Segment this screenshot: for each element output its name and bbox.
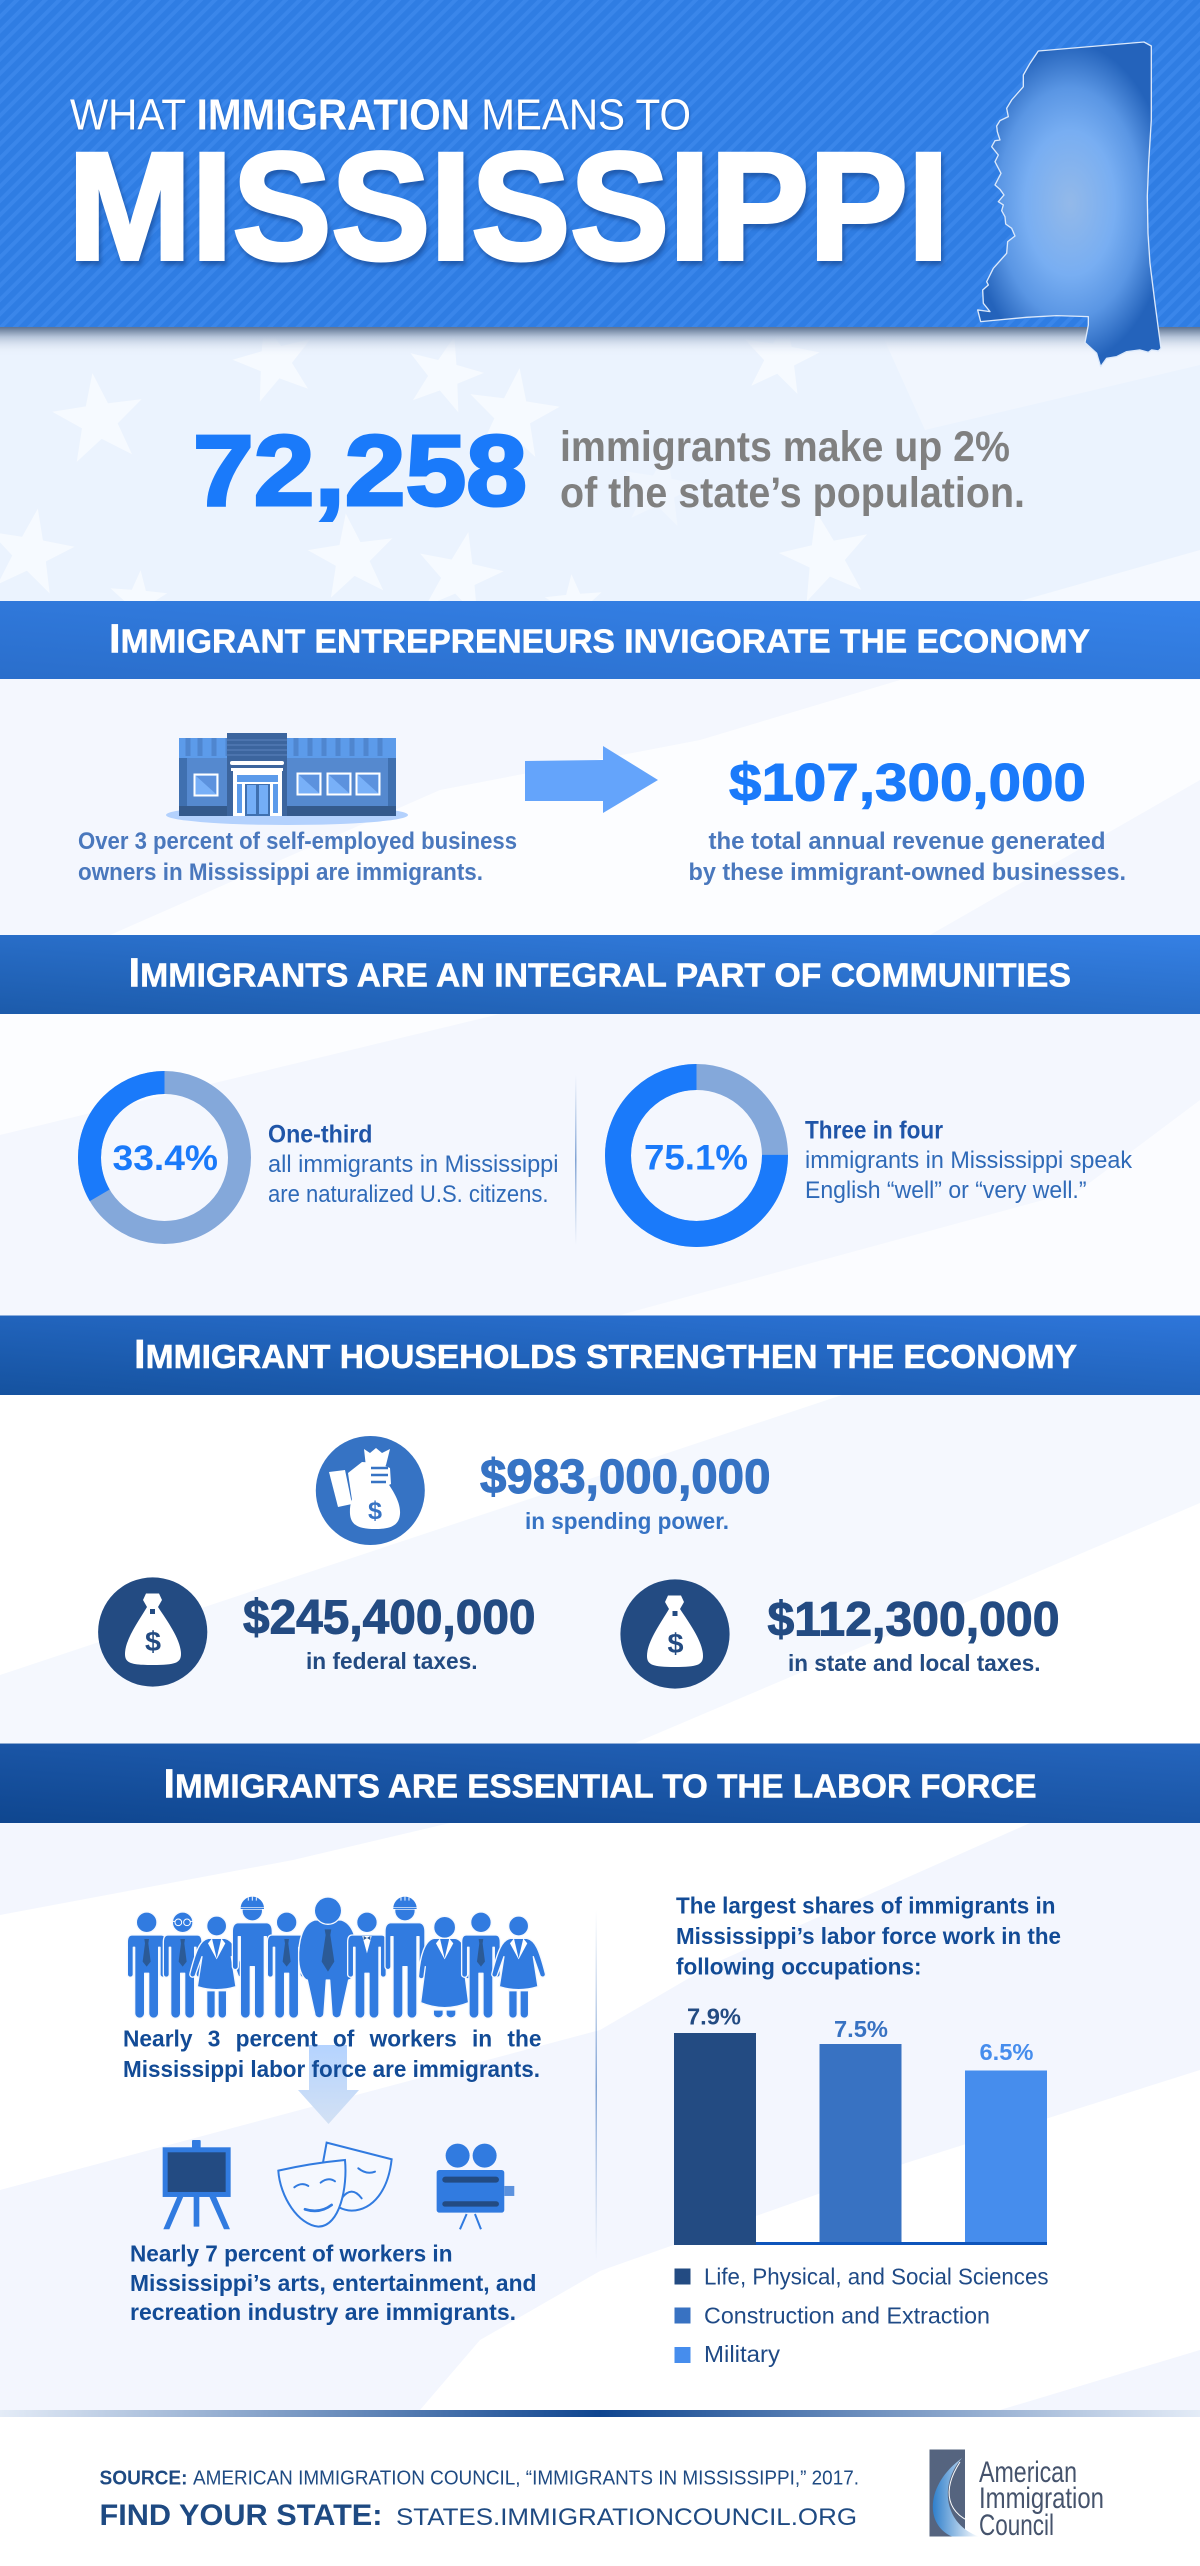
legend: Construction and Extraction bbox=[704, 2302, 990, 2328]
person bbox=[462, 1912, 500, 2018]
statistic caption bbox=[560, 423, 1025, 517]
logo: American Immigration Council: American bbox=[979, 2456, 1077, 2489]
statistic: state and local taxes: $112,300,000 bbox=[768, 1594, 1060, 1646]
text: arts and entertainment workers bbox=[130, 2240, 536, 2325]
text: three in four speak English bbox=[805, 1116, 1133, 1204]
section band: entrepreneurs bbox=[0, 601, 1200, 679]
text: chart heading bbox=[676, 1892, 1061, 1980]
text: workers in labor force: Nearly 3 percent of workers in the bbox=[123, 2026, 542, 2052]
person with glasses bbox=[163, 1912, 202, 2018]
title: Mississippi: MISSISSIPPI bbox=[68, 121, 949, 292]
person: woman bbox=[190, 1916, 243, 2018]
footer: source: AMERICAN IMMIGRATION COUNCIL, “IMMIGRANTS IN MISSISSIPPI,” 2017. bbox=[193, 2466, 859, 2490]
footer: source: SOURCE: bbox=[100, 2466, 188, 2490]
logo: American Immigration Council: Council bbox=[979, 2509, 1054, 2542]
statistic: business revenue bbox=[688, 754, 1126, 886]
statistic caption: of the state’s population. bbox=[560, 469, 1025, 517]
statistic: federal taxes: in federal taxes. bbox=[306, 1648, 478, 1674]
statistic: business revenue: by these immigrant-owned businesses. bbox=[688, 859, 1126, 886]
text: self-employed owners bbox=[78, 828, 517, 886]
footer: source bbox=[100, 2466, 859, 2532]
icon: money bag state and local bbox=[620, 1579, 730, 1689]
donut chart: 75.1%: 75.1% bbox=[644, 1138, 748, 1178]
person: hard hat bbox=[232, 1896, 272, 2018]
icon: hand holding money bag: $ bbox=[368, 1497, 382, 1525]
icon: hand holding money bag bbox=[316, 1436, 425, 1545]
icon: money bag federal bbox=[98, 1577, 207, 1687]
text: three in four speak English: Three in four bbox=[805, 1116, 943, 1144]
bar chart: occupations bbox=[674, 2004, 1047, 2245]
section band: labor force bbox=[0, 1744, 1200, 1823]
logo: American Immigration Council: Immigration bbox=[979, 2482, 1104, 2515]
big number: 72,258 bbox=[193, 415, 527, 527]
text: one-third naturalized: are naturalized U.S. citizens. bbox=[268, 1181, 548, 1208]
text: self-employed owners: Over 3 percent of self-employed business bbox=[78, 828, 517, 855]
bar: military bbox=[965, 2070, 1047, 2242]
statistic caption: immigrants make up 2% bbox=[560, 423, 1010, 471]
icon: film camera bbox=[437, 2144, 514, 2229]
text: three in four speak English: immigrants in Mississippi speak bbox=[805, 1147, 1133, 1174]
icon: easel bbox=[163, 2140, 231, 2229]
title: what immigration means to: WHAT IMMIGRATION MEANS TO bbox=[70, 90, 691, 140]
value label 7.9%: 7.9% bbox=[687, 2004, 741, 2030]
section band: households bbox=[0, 1316, 1200, 1395]
icon: money bag federal: $ bbox=[145, 1626, 161, 1657]
arrow: down bbox=[298, 2045, 359, 2124]
header panel bbox=[0, 0, 1200, 367]
statistic: state and local taxes: in state and local taxes. bbox=[788, 1650, 1040, 1676]
text: one-third naturalized bbox=[268, 1120, 558, 1208]
text: arts and entertainment workers: Nearly 7 percent of workers in bbox=[130, 2240, 452, 2266]
person: woman bbox=[492, 1916, 545, 2018]
donut chart: 75.1% bbox=[618, 1077, 775, 1234]
statistic: spending power bbox=[480, 1451, 770, 1534]
text: chart heading: following occupations: bbox=[676, 1954, 922, 1980]
person: large man bbox=[299, 1897, 357, 2018]
text: chart heading: Mississippi’s labor force work in the bbox=[676, 1923, 1061, 1949]
bar: life, physical, and social sciences bbox=[674, 2033, 756, 2245]
value label 7.5%: 7.5% bbox=[834, 2016, 888, 2042]
person bbox=[267, 1912, 306, 2018]
arrow: right bbox=[525, 746, 658, 813]
person bbox=[127, 1912, 166, 2018]
icon: money bag state and local: $ bbox=[668, 1628, 684, 1659]
text: arts and entertainment workers: Mississippi’s arts, entertainment, and bbox=[130, 2270, 536, 2296]
legend bbox=[674, 2264, 1048, 2367]
text: workers in labor force: Mississippi labor force are immigrants. bbox=[123, 2056, 540, 2082]
footer: source: FIND YOUR STATE: bbox=[100, 2499, 382, 2532]
statistic: federal taxes: $245,400,000 bbox=[243, 1592, 536, 1644]
bar: construction and extraction bbox=[820, 2044, 902, 2242]
statistic: spending power: $983,000,000 bbox=[480, 1451, 770, 1504]
statistic: 72,258 immigrants bbox=[193, 415, 1025, 527]
donut chart: 33.4% bbox=[90, 1082, 240, 1232]
icon: group of workers bbox=[127, 1896, 545, 2018]
text: self-employed owners: owners in Mississippi are immigrants. bbox=[78, 859, 483, 886]
footer: source: STATES.IMMIGRATIONCOUNCIL.ORG bbox=[396, 2504, 857, 2531]
value label 6.5%: 6.5% bbox=[980, 2039, 1034, 2065]
statistic: spending power: in spending power. bbox=[525, 1508, 729, 1534]
statistic: business revenue: $107,300,000 bbox=[729, 754, 1086, 812]
icon: theater masks bbox=[278, 2143, 392, 2227]
section band: entrepreneurs: IMMIGRANT ENTREPRENEURS INVIGORATE THE ECONOMY bbox=[109, 616, 1090, 662]
section band: communities: IMMIGRANTS ARE AN INTEGRAL PART OF COMMUNITIES bbox=[128, 950, 1071, 996]
logo: American Immigration Council bbox=[930, 2450, 1104, 2542]
text: one-third naturalized: One-third bbox=[268, 1120, 372, 1148]
person: bow tie bbox=[348, 1912, 386, 2018]
statistic: federal taxes bbox=[243, 1592, 536, 1674]
statistic: state and local taxes bbox=[768, 1594, 1060, 1676]
section band: labor force: IMMIGRANTS ARE ESSENTIAL TO THE LABOR FORCE bbox=[164, 1760, 1036, 1806]
donut chart: 33.4%: 33.4% bbox=[112, 1139, 218, 1178]
statistic: business revenue: the total annual revenue generated bbox=[708, 828, 1106, 855]
text: chart heading: The largest shares of immigrants in bbox=[676, 1892, 1056, 1918]
text: arts and entertainment workers: recreation industry are immigrants. bbox=[130, 2299, 516, 2325]
person: hard hat bbox=[385, 1896, 425, 2018]
icon: storefront building bbox=[166, 733, 408, 825]
person: large woman bbox=[418, 1916, 471, 2018]
legend: Life, Physical, and Social Sciences bbox=[704, 2264, 1048, 2290]
text: one-third naturalized: all immigrants in Mississippi bbox=[268, 1151, 558, 1178]
icon: Mississippi state map bbox=[978, 42, 1161, 367]
section band: communities bbox=[0, 935, 1200, 1014]
text: three in four speak English: English “well” or “very well.” bbox=[805, 1177, 1087, 1204]
legend: Military bbox=[704, 2341, 781, 2367]
text: workers in labor force bbox=[123, 2026, 542, 2082]
section band: households: IMMIGRANT HOUSEHOLDS STRENGTHEN THE ECONOMY bbox=[134, 1331, 1077, 1377]
